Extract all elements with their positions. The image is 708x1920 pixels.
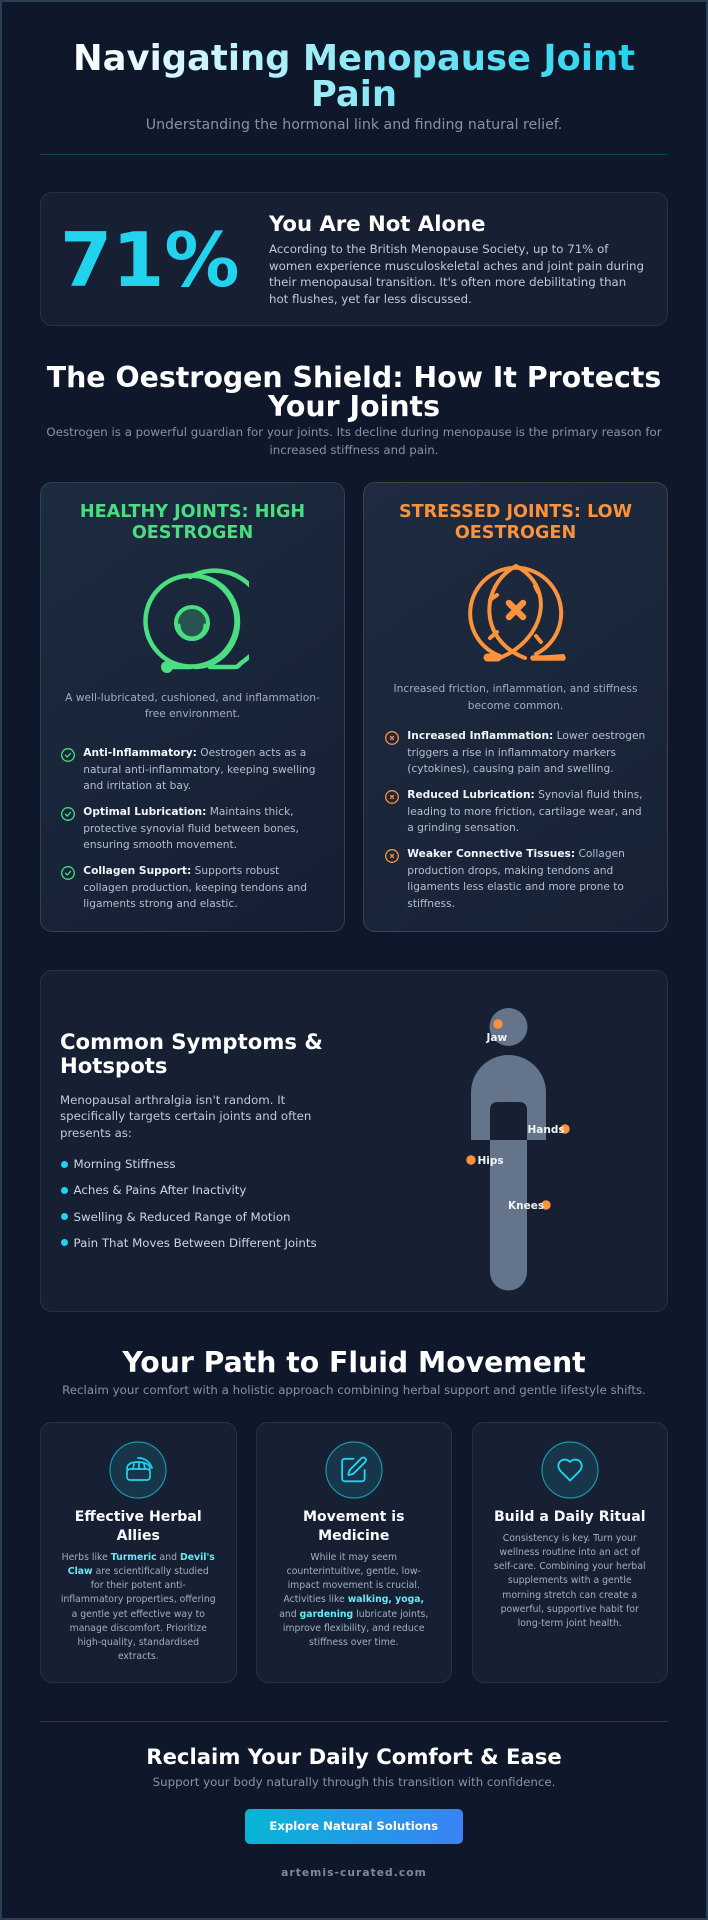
healthy description xyxy=(65,690,320,720)
text: Collagen Support: Supports robust xyxy=(83,864,279,877)
heading: oestrogen shield: The Oestrogen Shield: How It Protects xyxy=(47,361,661,394)
card text: Claw are scientifically studied xyxy=(68,1566,209,1577)
text: natural anti-inflammatory, keeping swelling xyxy=(83,762,316,776)
icon: herb basket xyxy=(109,1441,167,1499)
label: hips: Hips xyxy=(478,1155,504,1167)
icon: cross xyxy=(385,849,399,863)
text xyxy=(407,788,643,834)
icon: cross xyxy=(385,790,399,804)
healthy description: free environment. xyxy=(145,707,240,720)
card text: manage discomfort. Prioritize xyxy=(70,1623,207,1634)
text: ligaments strong and elastic. xyxy=(83,897,238,910)
card text: Consistency is key. Turn your xyxy=(503,1533,637,1544)
symptom: Morning Stiffness xyxy=(74,1157,176,1171)
symptoms intro: specifically targets certain joints and often xyxy=(60,1109,311,1123)
card text: impact movement is crucial. xyxy=(288,1580,420,1591)
panel: three approaches xyxy=(40,1422,668,1683)
section intro: Oestrogen is a powerful guardian for your joints. Its decline during menopause is the primary reason for xyxy=(46,425,662,439)
card heading: Effective Herbal xyxy=(75,1508,202,1524)
text: Optimal Lubrication: Maintains thick, xyxy=(83,805,294,818)
symptoms intro: presents as: xyxy=(60,1126,132,1140)
stat heading: You Are Not Alone xyxy=(269,211,485,236)
card text: improve flexibility, and reduce xyxy=(283,1623,425,1634)
symptom: Swelling & Reduced Range of Motion xyxy=(74,1210,291,1224)
card text xyxy=(279,1552,428,1648)
stressed description: become common. xyxy=(468,698,563,712)
item: collagen support xyxy=(61,864,307,910)
card heading xyxy=(75,1508,202,1544)
text: Weaker Connective Tissues: Collagen xyxy=(407,847,625,860)
card heading: Allies xyxy=(117,1528,160,1544)
stressed description: Increased friction, inflammation, and stiffness xyxy=(394,682,638,695)
card text: wellness routine into an act of xyxy=(500,1547,640,1558)
title: Navigating Menopause Joint xyxy=(73,38,635,79)
text: production drops, making tendons and xyxy=(407,864,613,876)
title xyxy=(73,41,635,112)
text: stiffness. xyxy=(407,896,455,910)
symptom list xyxy=(61,1157,317,1250)
symptoms heading: Hotspots xyxy=(60,1053,168,1078)
label: knees: Knees xyxy=(508,1200,544,1212)
card text: Herbs like Turmeric and Devil's xyxy=(62,1552,215,1563)
item: optimal lubrication xyxy=(61,805,299,851)
text xyxy=(83,864,307,910)
stressed heading: OESTROGEN xyxy=(455,523,576,543)
heading: oestrogen shield xyxy=(46,361,661,422)
text: (cytokines), causing pain and swelling. xyxy=(407,762,614,775)
icon: check xyxy=(61,866,75,880)
text: protective synovial fluid between bones, xyxy=(83,822,299,834)
card text: for their potent anti- xyxy=(91,1580,186,1591)
card text xyxy=(61,1552,216,1662)
item: weaker connective tissues xyxy=(385,847,625,910)
card text: high-quality, standardised xyxy=(77,1637,199,1648)
healthy heading: HEALTHY JOINTS: HIGH xyxy=(80,502,305,522)
stat text: hot flushes, yet far less discussed. xyxy=(269,292,472,306)
bullet xyxy=(60,1213,68,1220)
item: anti-inflammatory xyxy=(61,746,316,792)
text: triggers a rise in inflammatory markers xyxy=(407,746,616,758)
stressed heading xyxy=(399,502,632,543)
body figure xyxy=(466,1008,570,1290)
text xyxy=(83,746,316,792)
icon: stressed joint xyxy=(468,564,566,662)
footer url: artemis-curated.com xyxy=(281,1866,427,1879)
label: hands: Hands xyxy=(528,1124,565,1136)
path intro: Reclaim your comfort with a holistic approach combining herbal support and gentle lifestyle shifts. xyxy=(62,1383,646,1397)
healthy description: A well-lubricated, cushioned, and inflammation- xyxy=(65,690,320,704)
card text: counterintuitive, gentle, low- xyxy=(287,1566,421,1577)
card: movement xyxy=(256,1422,452,1683)
icon: check xyxy=(61,807,75,821)
panel: stressed joints xyxy=(363,482,668,932)
text: and irritation at bay. xyxy=(83,779,191,792)
icon: healthy joint xyxy=(143,568,249,673)
symptoms heading xyxy=(60,1029,323,1078)
card heading: Medicine xyxy=(318,1528,389,1544)
text xyxy=(83,805,299,851)
subtitle: Understanding the hormonal link and finding natural relief. xyxy=(146,117,562,133)
item: reduced lubrication xyxy=(385,788,643,834)
panel: 71% statistic xyxy=(40,192,668,326)
symptoms heading: Common Symptoms & xyxy=(60,1029,323,1054)
text: ensuring smooth movement. xyxy=(83,838,237,851)
stat text xyxy=(269,242,644,306)
symptom: Pain That Moves Between Different Joints xyxy=(74,1236,317,1250)
heading: path to fluid movement: Your Path to Fluid Movement xyxy=(122,1346,586,1379)
panel: healthy joints xyxy=(40,482,345,932)
card text xyxy=(494,1533,646,1629)
card text: powerful, supportive habit for xyxy=(501,1604,639,1615)
symptoms intro xyxy=(60,1092,311,1140)
card heading: Build a Daily Ritual xyxy=(494,1508,646,1524)
text xyxy=(407,729,645,775)
section intro xyxy=(46,425,662,456)
stressed heading: STRESSED JOINTS: LOW xyxy=(399,502,632,522)
stat text: According to the British Menopause Society, up to 71% of xyxy=(269,242,608,256)
stressed description xyxy=(394,682,638,712)
symptoms intro: Menopausal arthralgia isn't random. It xyxy=(60,1092,285,1106)
symptom: Aches & Pains After Inactivity xyxy=(74,1183,246,1197)
stat text: their menopausal transition. It's often more debilitating than xyxy=(269,275,626,289)
text: Reduced Lubrication: Synovial fluid thins, xyxy=(407,788,643,801)
healthy heading xyxy=(80,502,305,543)
card text: self-care. Combining your herbal xyxy=(494,1561,646,1572)
card text: extracts. xyxy=(118,1651,159,1662)
icon: pencil xyxy=(325,1441,383,1499)
card text: Activities like walking, yoga, xyxy=(283,1594,424,1605)
card text: inflammatory properties, offering xyxy=(61,1594,216,1605)
title: Pain xyxy=(311,74,397,114)
heading: oestrogen shield: Your Joints xyxy=(268,390,440,422)
card text: morning stretch can create a xyxy=(502,1590,637,1601)
bullet xyxy=(60,1160,68,1168)
healthy heading: OESTROGEN xyxy=(132,523,253,543)
icon: cross xyxy=(385,731,399,745)
text: collagen production, keeping tendons and xyxy=(83,880,307,894)
text: Anti-Inflammatory: Oestrogen acts as a xyxy=(83,746,306,759)
card text: supplements with a gentle xyxy=(508,1575,632,1586)
button: Explore Natural Solutions xyxy=(269,1819,438,1833)
text: leading to more friction, cartilage wear, and xyxy=(407,804,642,818)
card heading xyxy=(303,1508,405,1544)
card text: long-term joint health. xyxy=(518,1618,622,1629)
text: Increased Inflammation: Lower oestrogen xyxy=(407,729,645,742)
card text: While it may seem xyxy=(310,1552,397,1563)
bullet xyxy=(60,1239,68,1246)
text: ligaments less elastic and more prone to xyxy=(407,880,624,893)
big number: 71% xyxy=(60,216,240,304)
footer heading: Reclaim Your Daily Comfort & Ease xyxy=(146,1744,562,1769)
button xyxy=(245,1809,462,1844)
footer subtitle: Support your body naturally through this transition with confidence. xyxy=(153,1775,555,1789)
card: daily ritual xyxy=(472,1422,668,1683)
card heading: Movement is xyxy=(303,1508,405,1524)
bullet xyxy=(60,1186,68,1194)
panel: symptoms and hotspots xyxy=(40,970,668,1312)
text xyxy=(407,847,625,910)
section intro: increased stiffness and pain. xyxy=(269,442,439,456)
item: increased inflammation xyxy=(385,729,645,775)
stat text: women experience musculoskeletal aches and joint pain during xyxy=(269,258,644,272)
icon: check xyxy=(61,748,75,762)
card text: stiffness over time. xyxy=(309,1637,398,1648)
label: jaw: Jaw xyxy=(486,1032,507,1044)
card: herbal allies xyxy=(40,1422,236,1683)
icon: heart xyxy=(541,1441,599,1499)
text: a grinding sensation. xyxy=(407,821,519,834)
card text: a gentle yet effective way to xyxy=(72,1609,205,1620)
card text: and gardening lubricate joints, xyxy=(279,1609,428,1620)
